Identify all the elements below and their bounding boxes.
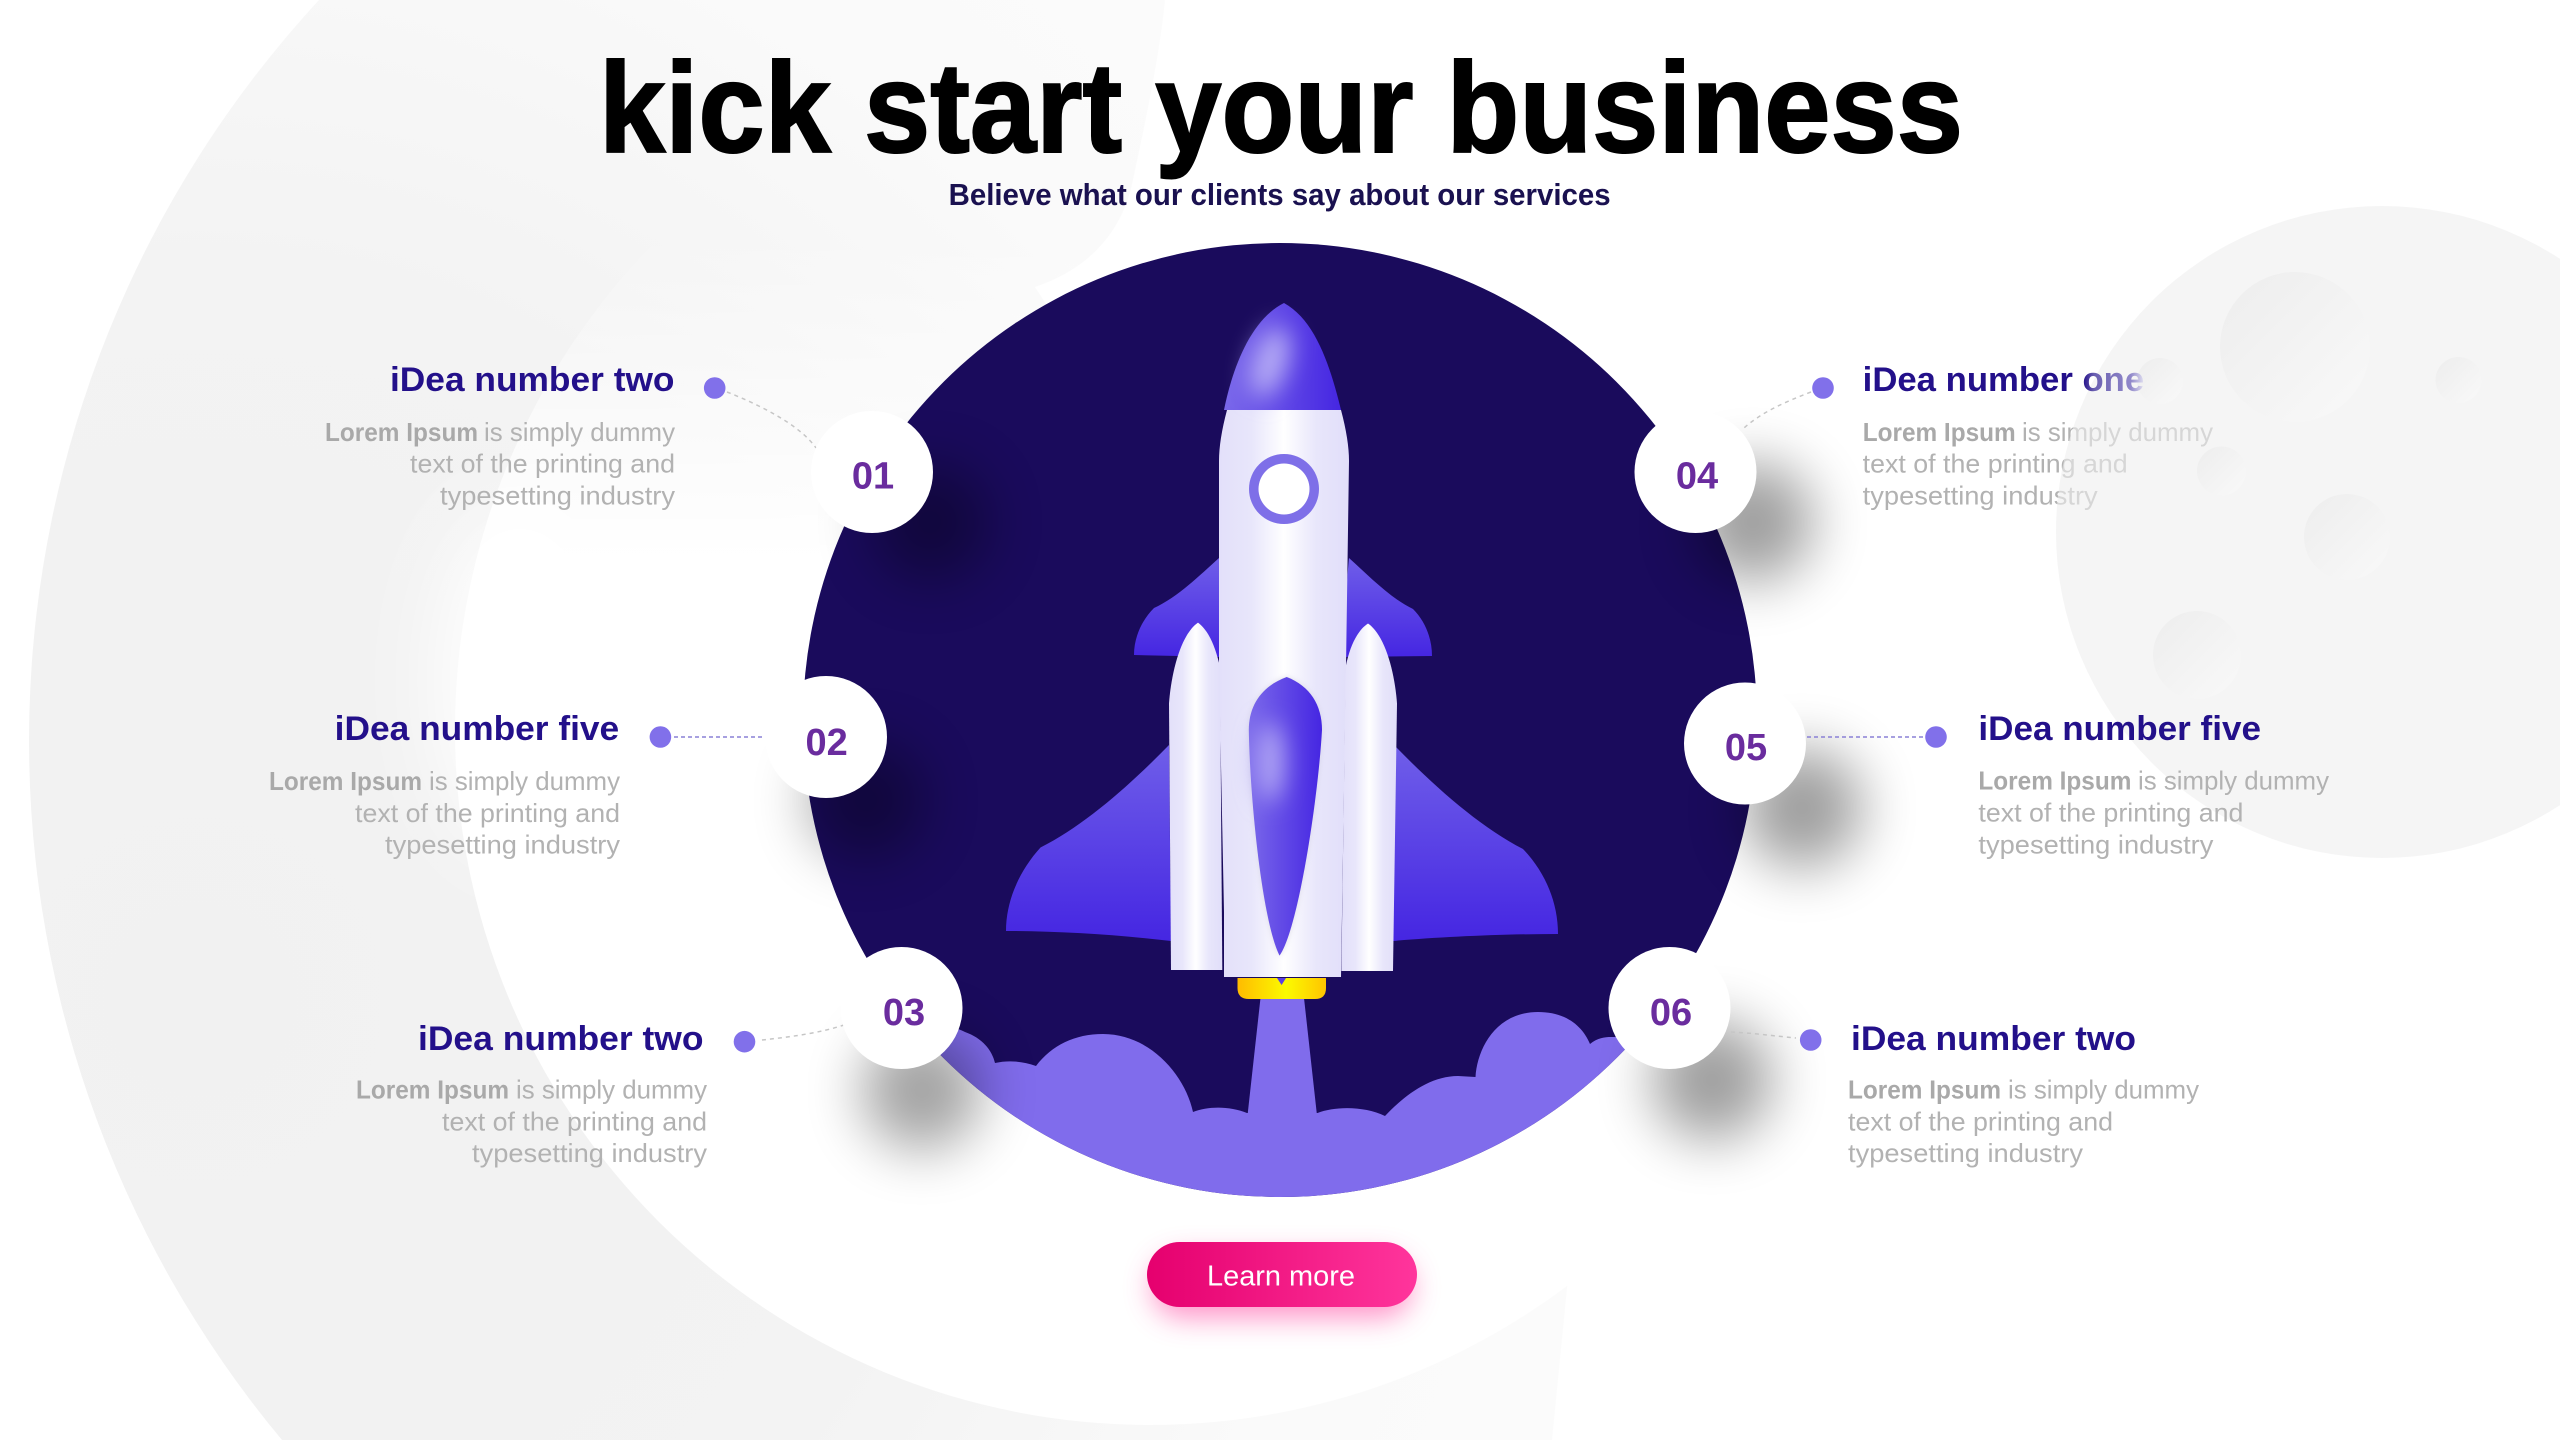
connector	[1731, 1032, 1796, 1038]
text block: idea 01: text of the printing and	[410, 449, 675, 479]
text block: idea 02: Lorem Ipsum	[269, 766, 422, 796]
idea 03 node: 03	[883, 992, 925, 1034]
connector	[1807, 736, 1924, 738]
text block: idea 02: iDea number five	[335, 710, 619, 748]
text block: idea 05: iDea number five	[1978, 710, 2261, 748]
text block: idea 03: iDea number two	[418, 1020, 704, 1058]
idea 04 node: 04	[1676, 456, 1718, 498]
text block: idea 06: Lorem Ipsum	[1848, 1075, 2001, 1105]
idea 06 node: 06	[1650, 992, 1692, 1034]
text block: idea 03: is simply dummy	[516, 1075, 707, 1105]
text block: idea 02	[269, 710, 620, 860]
subtitle: Believe what our clients say about our services	[949, 177, 1611, 212]
idea 01 node: 01	[852, 456, 894, 498]
text block: idea 03: typesetting industry	[472, 1138, 707, 1168]
text block: idea 05: Lorem Ipsum	[1978, 766, 2131, 796]
text block: idea 01: Lorem Ipsum	[325, 417, 478, 447]
idea 05 node: 05	[1725, 727, 1767, 769]
connector	[727, 392, 816, 448]
text block: idea 06	[1848, 1020, 2199, 1168]
idea 02 node	[650, 676, 887, 798]
text block: idea 02: text of the printing and	[355, 798, 620, 828]
idea 02 node: 02	[806, 722, 848, 764]
text block: idea 05: text of the printing and	[1978, 798, 2243, 828]
text block: idea 04 body: text of the printing and	[1863, 448, 2128, 478]
text block: idea 05: typesetting industry	[1978, 830, 2213, 860]
text block: idea 06: text of the printing and	[1848, 1107, 2113, 1137]
nose cone	[1224, 303, 1341, 410]
exhaust clouds	[940, 1012, 1625, 1197]
text block: idea 01: typesetting industry	[440, 480, 675, 510]
connector	[762, 1025, 844, 1040]
dark planet disc	[803, 243, 1757, 1197]
idea 01 node	[704, 377, 933, 533]
center fin	[1249, 677, 1322, 956]
text block: idea 06: is simply dummy	[2008, 1075, 2199, 1105]
text block: idea 02: is simply dummy	[429, 766, 620, 796]
text block: idea 03: text of the printing and	[442, 1107, 707, 1137]
exhaust flame	[1247, 998, 1318, 1120]
text block: idea 03	[356, 1020, 707, 1168]
right booster	[1341, 624, 1397, 971]
drop shadows of number badges	[808, 462, 1862, 1150]
button: learn more: Learn more	[1207, 1260, 1355, 1292]
text block: idea 03: Lorem Ipsum	[356, 1075, 509, 1105]
moon with craters	[2056, 206, 2560, 858]
nozzle	[1238, 978, 1326, 999]
idea 03 node	[734, 947, 962, 1069]
text block: idea 01	[325, 361, 675, 510]
text block: idea 04 body: is simply dummy	[2022, 417, 2213, 447]
text block: idea 04 body	[1863, 417, 2213, 510]
button: learn more	[1147, 1242, 1417, 1318]
idea 05 node	[1684, 682, 1947, 804]
text block: idea 05: is simply dummy	[2138, 766, 2329, 796]
text block: idea 05	[1978, 710, 2329, 860]
idea 04 node	[1634, 377, 1834, 533]
text block: idea 06: iDea number two	[1851, 1020, 2136, 1058]
text block: idea 06: typesetting industry	[1848, 1138, 2083, 1168]
connector	[674, 736, 764, 738]
upper wings	[1134, 558, 1432, 657]
lower wings	[1006, 745, 1558, 941]
text block: idea 01: is simply dummy	[484, 417, 675, 447]
text block: idea 04 body: typesetting industry	[1863, 480, 2098, 510]
rocket	[1006, 303, 1558, 999]
background: pale crescent	[29, 0, 1845, 1440]
text block: idea 01: iDea number two	[390, 361, 674, 399]
text block: idea 02: typesetting industry	[385, 830, 620, 860]
porthole	[1249, 454, 1319, 524]
heading: idea 04: iDea number one	[1863, 361, 2144, 399]
idea 06 node	[1608, 947, 1821, 1069]
hull	[1219, 410, 1349, 977]
left booster	[1169, 623, 1222, 970]
text block: idea 04 body: Lorem Ipsum	[1863, 417, 2016, 447]
title: kick start your business	[599, 37, 1963, 180]
connector	[1744, 392, 1811, 428]
